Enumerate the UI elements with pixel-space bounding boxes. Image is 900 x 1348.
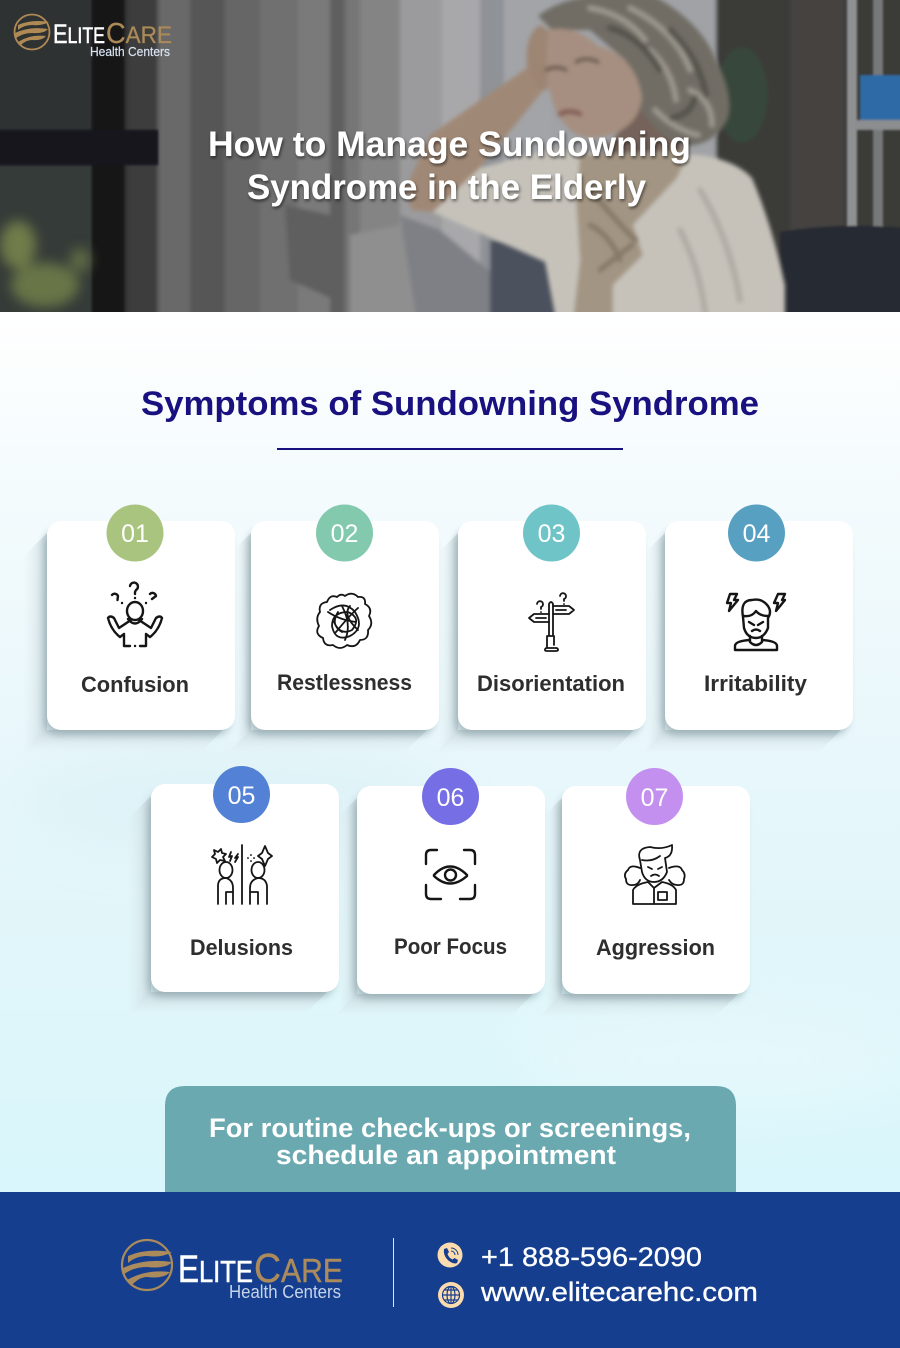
badge 01: 01 [121, 520, 149, 548]
background: pale sky gradient [0, 312, 900, 1192]
icon: tangled brain [317, 594, 371, 648]
title: How to Manage Sundowning [208, 125, 691, 164]
logo: Elite Care footer: CARE [254, 1245, 343, 1291]
icon: phone [438, 1242, 462, 1268]
badge 01 [106, 504, 164, 562]
icon: angry man with steam [625, 845, 685, 904]
logo: Elite Care header: Health Centers [90, 44, 170, 59]
label: Irritability: Irritability [704, 671, 808, 696]
card 04: Irritability [665, 504, 853, 730]
logo: Elite Care footer: ELITE [178, 1249, 253, 1291]
label: Confusion: Confusion [81, 672, 189, 697]
section heading: Symptoms of Sundowning Syndrome [141, 385, 759, 423]
badge 03: 03 [538, 520, 565, 548]
badge 06 [422, 768, 479, 825]
badge 02: 02 [331, 520, 358, 548]
title: Syndrome in the Elderly [247, 168, 647, 207]
text: phone number: +1 888-596-2090 [481, 1242, 702, 1272]
icon: confused person [108, 583, 162, 646]
logo: Elite Care footer: Health Centers [229, 1282, 341, 1302]
footer band [0, 1192, 900, 1348]
card shadows [23, 530, 848, 1018]
card 02: Restlessness [251, 504, 439, 730]
badge 05: 05 [228, 782, 255, 810]
badge 04 [728, 504, 785, 562]
label: Poor Focus: Poor Focus [394, 934, 507, 959]
call to action panel: schedule an appointment [276, 1140, 616, 1170]
call to action panel: For routine check-ups or screenings, [209, 1113, 691, 1143]
icon: eye in focus frame [426, 850, 475, 899]
icon: signpost [529, 593, 574, 651]
badge 06: 06 [437, 784, 464, 812]
call to action panel [165, 1086, 736, 1192]
logo: Elite Care header: CARE [106, 18, 172, 50]
label: Disorientation: Disorientation [477, 671, 625, 696]
icon: globe [438, 1282, 464, 1308]
card 06: Poor Focus [357, 768, 545, 994]
badge 07: 07 [641, 784, 668, 812]
text: website: www.elitecarehc.com [480, 1277, 758, 1307]
card 05: Delusions [151, 766, 339, 992]
badge 03 [523, 504, 580, 562]
icon: two figures divided [212, 845, 272, 904]
title [208, 125, 691, 207]
badge 07 [626, 768, 683, 825]
logo: Elite Care header [14, 14, 172, 59]
card 07: Aggression [562, 768, 750, 994]
card 03: Disorientation [458, 504, 646, 730]
label: Restlessness: Restlessness [277, 670, 412, 695]
icon: irritated person [727, 594, 785, 650]
header photo: woman at a window [0, 0, 900, 340]
label: Aggression: Aggression [596, 935, 715, 960]
logo: Elite Care header: ELITE [53, 19, 105, 49]
badge 02 [316, 504, 373, 562]
badge 05 [213, 766, 270, 823]
badge 04: 04 [743, 520, 770, 548]
label: Delusions: Delusions [190, 935, 293, 960]
card 01: Confusion [47, 504, 235, 730]
logo: Elite Care footer [122, 1240, 343, 1302]
